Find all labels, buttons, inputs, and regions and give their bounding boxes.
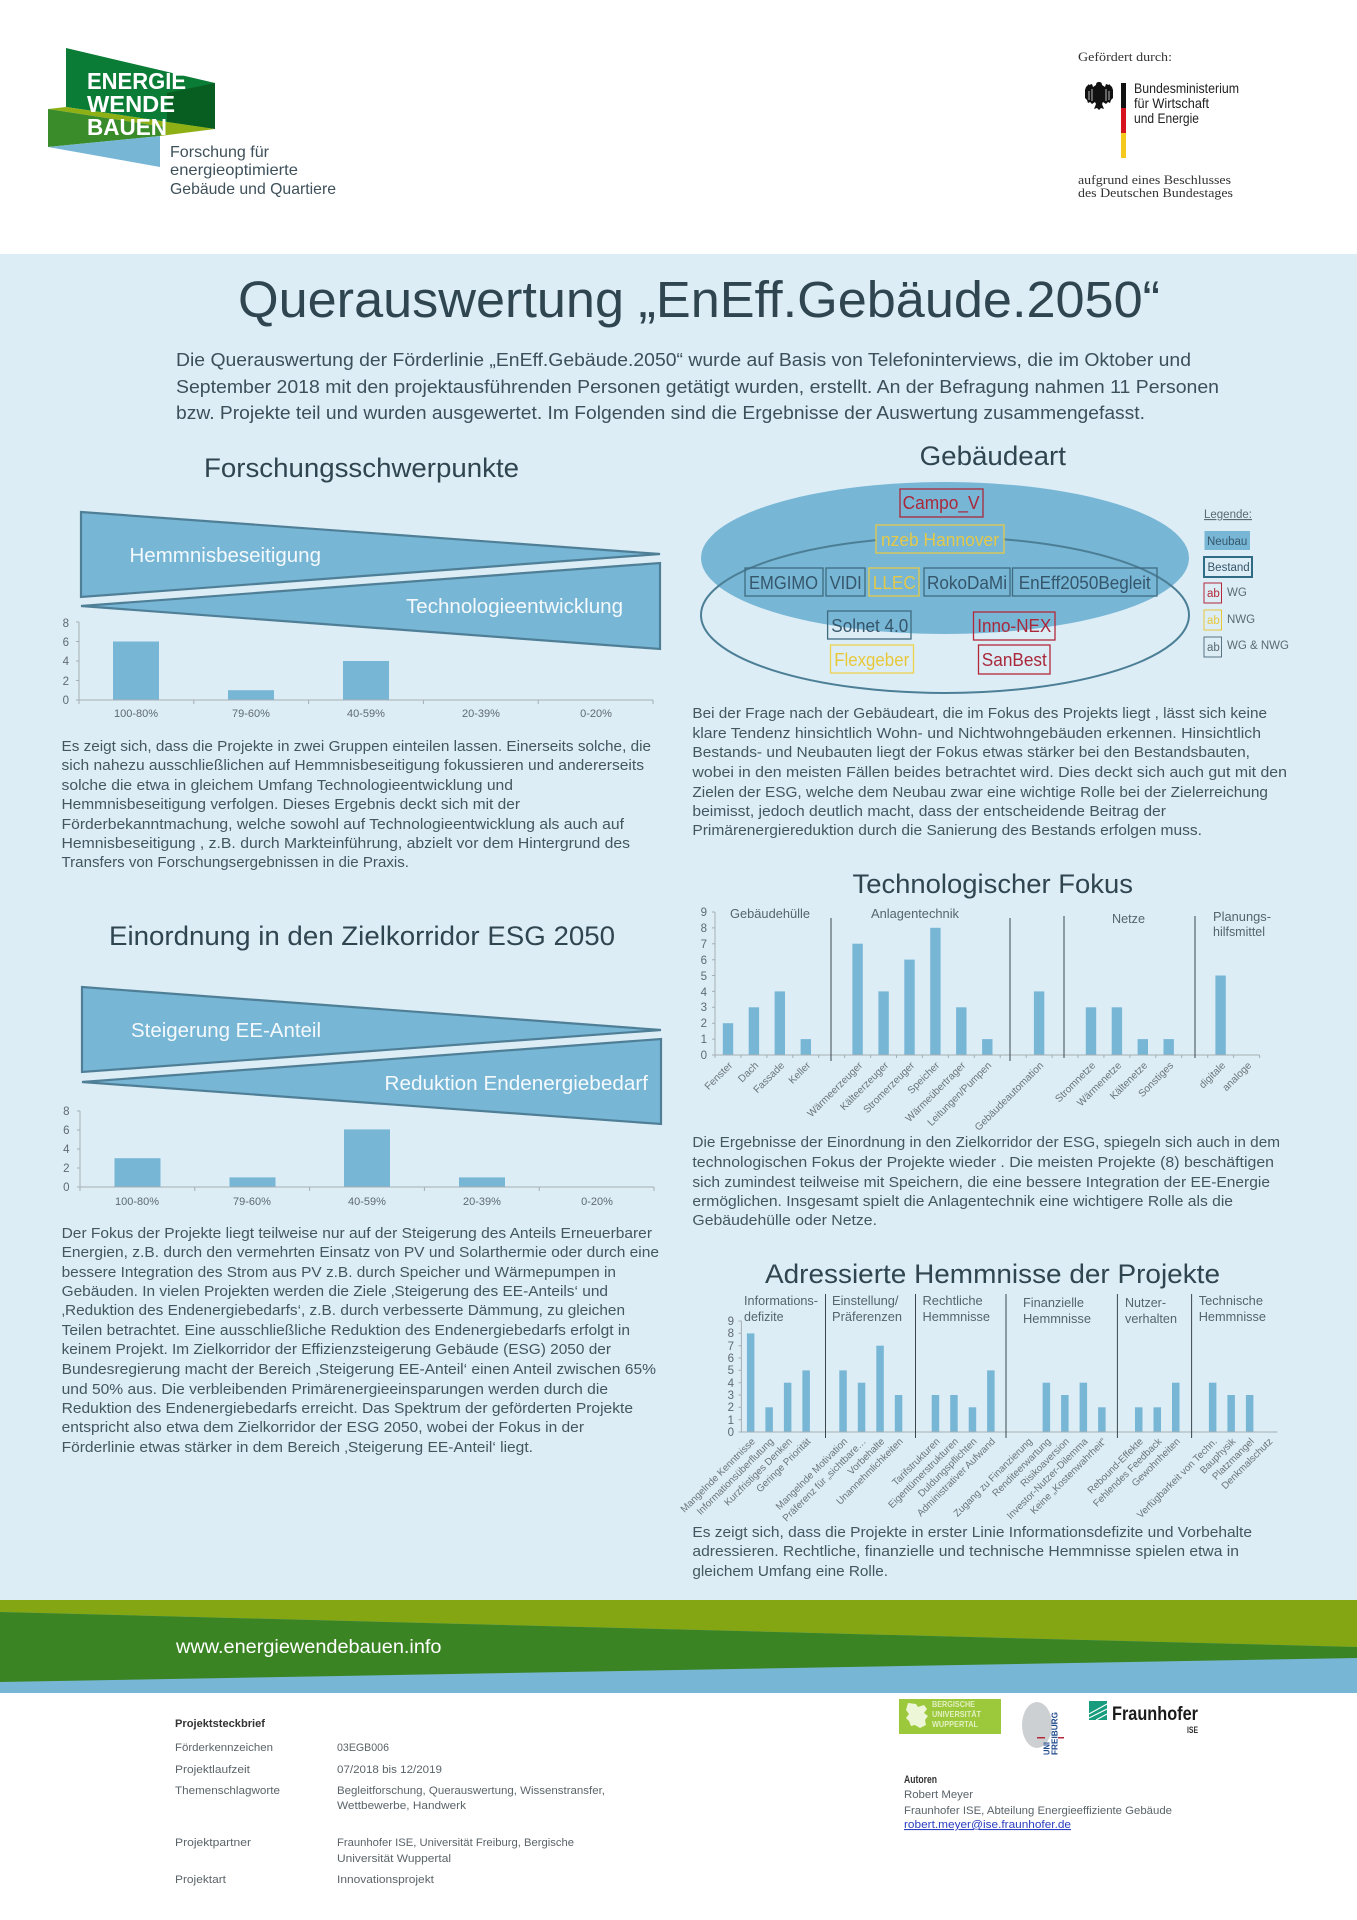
bar chart: Unannehmlichkeiten [835, 1436, 906, 1507]
diagram: wedges [82, 987, 661, 1124]
bar chart: 0-20% [580, 708, 612, 720]
bar chart: 4 [63, 656, 70, 668]
text block [692, 1135, 1280, 1229]
diagram: wedges: Reduktion Endenergiebedarf [384, 1073, 648, 1095]
diagram: wedges: Technologieentwicklung [406, 596, 623, 618]
project profile: Projektlaufzeit [175, 1764, 250, 1776]
bar chart: Fassade [752, 1060, 787, 1096]
logo: Bergische Universität Wuppertal: WUPPERTAL [932, 1719, 978, 1729]
bar chart: Informationsüberflutung [695, 1436, 776, 1517]
venn diagram: Campo_V [903, 492, 980, 514]
bar chart: 40-59% [348, 1196, 386, 1208]
bar chart: Verfügbarkeit von Techn. [1135, 1436, 1220, 1521]
bar chart: Investor-Nutzer-Dilemma [1005, 1436, 1091, 1522]
bar chart: Gebäudeautomation [973, 1060, 1046, 1133]
legend: Legende: [1204, 509, 1252, 521]
bar chart: Gebäudehülle [730, 906, 810, 921]
text block: bessere Integration des Strom aus PV z.B. durch Speicher und Wärmepumpen in [62, 1265, 616, 1281]
text block [62, 739, 651, 871]
bar chart: verhalten [1125, 1311, 1177, 1326]
bar chart: Kurzfristiges Denken [723, 1436, 795, 1509]
project profile: Förderkennzeichen [175, 1742, 273, 1754]
bar chart: Leitungen/Pumpen [926, 1060, 994, 1129]
logo: Energiewendebauen [48, 48, 336, 198]
text block: Primärenergiereduktion durch die Sanierung des Bestands erfolgen muss. [692, 823, 1202, 839]
bar chart: Finanzielle [1023, 1295, 1084, 1310]
bar chart: Kältenetze [1108, 1060, 1150, 1102]
bar chart: Gewohnheiten [1130, 1436, 1183, 1489]
logo: Fraunhofer ISE [1089, 1701, 1199, 1735]
text block: keinem Projekt. Im Zielkorridor der Effizienzsteigerung Gebäude (ESG) 2050 der [62, 1342, 611, 1358]
logo: Bundesministerium für Wirtschaft und Energie: des Deutschen Bundestages [1078, 185, 1233, 200]
project profile: Projektart [175, 1874, 226, 1886]
text block: Energien, z.B. durch den vermehrten Einsatz von PV und Solarthermie oder durch eine [62, 1245, 659, 1261]
text block: klare Tendenz hinsichtlich Wohn- und Nichtwohngebäuden erkennen. Hinsichtlich [692, 726, 1261, 742]
bar chart: 2 [63, 676, 69, 688]
text block: adressieren. Rechtliche, finanzielle und technische Hemmnisse spielen etwa in [692, 1544, 1239, 1560]
bar chart: Zugang zu Finanzierung [952, 1436, 1035, 1519]
intro text: bzw. Projekte teil und wurden ausgewertet. Im Folgenden sind die Ergebnisse der Auswertung zusammengefasst. [176, 402, 1145, 423]
legend: Neubau [1207, 536, 1247, 548]
bar chart: 6 [701, 955, 707, 967]
logo: Energiewendebauen: ENERGIE [87, 68, 186, 94]
panel: Adressierte Hemmnisse [679, 1259, 1277, 1580]
intro text: September 2018 mit den projektausführenden Personen getätigt wurden, erstellt. An der Befragung nahmen 11 Personen [176, 376, 1219, 397]
intro text: Die Querauswertung der Förderlinie „EnEff.Gebäude.2050“ wurde auf Basis von Telefoninterviews, die im Oktober und [176, 349, 1191, 370]
bar chart: Risikoaversion [1019, 1436, 1072, 1490]
bar chart: Bauphysik [1198, 1436, 1238, 1476]
project profile: Universität Wuppertal [337, 1853, 451, 1865]
bar chart: 6 [63, 1125, 70, 1137]
bar chart: Technische [1199, 1293, 1263, 1308]
logo: Uni Freiburg: FREIBURG [1050, 1712, 1060, 1755]
text block: Förderlinie etwas stärker in dem Bereich ‚Steigerung EE-Anteil‘ liegt. [62, 1440, 533, 1456]
bar chart: 1 [728, 1415, 734, 1427]
logo: Uni Freiburg [1022, 1702, 1064, 1755]
text block: Es zeigt sich, dass die Projekte in zwei Gruppen einteilen lassen. Einerseits solche, die [62, 739, 651, 755]
bar chart: Nutzer- [1125, 1295, 1166, 1310]
text block: Bundesregierung macht der Bereich ‚Steigerung EE-Anteil‘ einen Anteil zwischen 65% [62, 1362, 656, 1378]
project profile [175, 1718, 605, 1886]
text block: Transfers von Forschungsergebnissen in die Praxis. [62, 855, 409, 871]
bar chart: 8 [728, 1328, 734, 1340]
bar chart: Wärmeübertrager [904, 1060, 969, 1125]
bar chart: 100-80% [114, 708, 158, 720]
text block: Hemmnisbeseitigung verfolgen. Dieses Ergebnis deckt sich mit der [62, 797, 520, 813]
logo: Bergische Universität Wuppertal: UNIVERSITÄT [932, 1709, 982, 1719]
bar chart: Fehlendes Feedback [1091, 1436, 1164, 1509]
logo: Bundesministerium für Wirtschaft und Energie: für Wirtschaft [1134, 95, 1209, 111]
bar chart: Stromerzeuger [862, 1060, 918, 1116]
bar chart: 79-60% [232, 708, 270, 720]
text block: Teilen betrachtet. Eine ausschließliche Reduktion des Endenergiebedarfs erfolgt in [62, 1323, 630, 1339]
logo: Bundesministerium für Wirtschaft und Energie [1078, 49, 1239, 200]
bar chart: 79-60% [233, 1196, 271, 1208]
text block: solche die etwa in gleichem Umfang Technologieentwicklung und [62, 778, 513, 794]
bar chart: 1 [701, 1034, 707, 1046]
bar chart: analoge [1221, 1060, 1254, 1094]
project profile: 03EGB006 [337, 1742, 389, 1754]
venn diagram: RokoDaMi [927, 572, 1007, 593]
heading: Gebäudeart [920, 441, 1067, 471]
bar chart: 2 [701, 1018, 707, 1030]
bar chart: 9 [728, 1316, 734, 1328]
bar chart: Mangelnde Motivation [774, 1436, 850, 1512]
logo: Energiewendebauen: Gebäude und Quartiere [170, 181, 336, 198]
authors: Robert Meyer [904, 1789, 973, 1801]
bar chart: 40-59% [347, 708, 385, 720]
text block [691, 706, 1287, 839]
project profile: 07/2018 bis 12/2019 [337, 1764, 442, 1776]
title: Querauswertung „EnEff.Gebäude.2050“ [238, 271, 1160, 328]
venn diagram [701, 482, 1189, 693]
text block: Es zeigt sich, dass die Projekte in erster Linie Informationsdefizite und Vorbehalte [692, 1525, 1252, 1541]
bar chart: Mangelnde Kenntnisse [679, 1436, 758, 1515]
bar chart: Anlagentechnik [871, 906, 959, 921]
bar chart: 0-20% [581, 1196, 613, 1208]
text block: Gebäudehülle oder Netze. [692, 1213, 877, 1229]
bar chart: Informations- [744, 1293, 818, 1308]
bar chart: 4 [701, 987, 708, 999]
venn diagram: EnEff2050Begleit [1019, 572, 1151, 593]
text block: ermöglichen. Insgesamt spielt die Anlagentechnik eine wichtigere Rolle als die [692, 1194, 1233, 1210]
bar chart: 8 [63, 618, 69, 630]
text block: Hemnisbeseitigung , z.B. durch Markteinführung, abzielt vor dem Hintergrund des [62, 836, 630, 852]
project profile: Themenschlagworte [175, 1785, 280, 1797]
bar chart: digitale [1198, 1060, 1228, 1091]
bar chart [701, 906, 1271, 1133]
text block: sich zumindest teilweise mit Speichern, die eine bessere Integration der EE-Energie [692, 1175, 1270, 1191]
legend: ab [1207, 642, 1220, 654]
bar chart: Administrativer Aufwand [915, 1436, 998, 1519]
bar chart: Tarifstrukturen [891, 1436, 943, 1488]
footer band [0, 1600, 1357, 1693]
bar chart: Vorbehalte [846, 1436, 887, 1478]
venn diagram: Solnet 4.0 [831, 615, 908, 636]
diagram: wedges: Steigerung EE-Anteil [131, 1020, 321, 1042]
logo: Fraunhofer ISE: ISE [1187, 1725, 1198, 1735]
bar chart: Präferenz für „sichtbare… [781, 1436, 869, 1524]
heading: Adressierte Hemmnisse der Projekte [765, 1259, 1220, 1289]
diagram: wedges [81, 512, 660, 649]
bar chart: 20-39% [463, 1196, 501, 1208]
text block [692, 1525, 1252, 1580]
text block: Gebäuden. In vielen Projekten werden die Ziele ‚Steigerung des EE-Anteils‘ und [62, 1284, 608, 1300]
venn diagram: nzeb Hannover [881, 529, 999, 550]
bar chart: 2 [728, 1402, 734, 1414]
logo: Bundesministerium für Wirtschaft und Energie: Gefördert durch: [1078, 49, 1172, 64]
venn diagram: VIDI [830, 572, 862, 593]
bar chart: Wärmenetze [1076, 1060, 1124, 1109]
heading: Forschungsschwerpunkte [204, 453, 519, 483]
logo: Bergische Universität Wuppertal: BERGISCHE [932, 1699, 975, 1709]
venn diagram: Inno-NEX [977, 615, 1051, 636]
bar chart: Einstellung/ [832, 1293, 899, 1308]
authors: Fraunhofer ISE, Abteilung Energieeffiziente Gebäude [904, 1805, 1172, 1817]
text block: gleichem Umfang eine Rolle. [692, 1564, 888, 1580]
panel: Technologischer Fokus [692, 869, 1280, 1229]
text block [62, 1226, 659, 1456]
bar chart: Präferenzen [832, 1309, 902, 1324]
bar chart [63, 618, 653, 720]
bar chart: hilfsmittel [1213, 924, 1265, 939]
venn diagram: LLEC [873, 572, 916, 593]
text block: Bestands- und Neubauten liegt der Fokus etwas stärker bei den Bestandsbauten, [692, 745, 1250, 761]
heading: Einordnung in den Zielkorridor ESG 2050 [109, 921, 615, 951]
bar chart: Rebound-Effekte [1086, 1436, 1146, 1496]
bar chart: 5 [701, 971, 707, 983]
bar chart [63, 1106, 654, 1208]
panel: Forschungsschwerpunkte [62, 453, 660, 871]
bar chart: 7 [701, 939, 707, 951]
authors: Autoren [904, 1774, 937, 1786]
bar chart: 6 [728, 1353, 734, 1365]
project profile: Fraunhofer ISE, Universität Freiburg, Bergische [337, 1837, 574, 1849]
bar chart: 0 [63, 695, 69, 707]
bar chart: Wärmeerzeuger [806, 1060, 866, 1120]
bar chart: Dach [737, 1060, 761, 1085]
website link: www.energiewendebauen.info [175, 1637, 442, 1658]
bar chart: 4 [728, 1378, 735, 1390]
bar chart: Duldungspflichten [916, 1436, 980, 1500]
text block: Die Ergebnisse der Einordnung in den Zielkorridor der ESG, spiegeln sich auch in dem [692, 1135, 1280, 1151]
legend: NWG [1227, 614, 1255, 626]
bar chart: 6 [63, 637, 69, 649]
text block: ‚Reduktion des Endenergiebedarfs‘, z.B. durch verbesserte Dämmung, zu gleichen [62, 1303, 625, 1319]
heading: Technologischer Fokus [852, 869, 1133, 899]
bar chart: 100-80% [115, 1196, 159, 1208]
text block: und 50% aus. Die verbleibenden Primärenergieeinsparungen werden durch die [62, 1382, 608, 1398]
intro text [176, 349, 1219, 423]
text block: wobei in den meisten Fällen beides betrachtet wird. Dies deckt sich auch gut mit den [691, 765, 1287, 781]
venn diagram: Flexgeber [834, 649, 909, 670]
diagram: wedges: Hemmnisbeseitigung [130, 545, 321, 567]
text block: Bei der Frage nach der Gebäudeart, die im Fokus des Projekts liegt , lässt sich keine [692, 706, 1267, 722]
bar chart: Sonstiges [1137, 1060, 1176, 1100]
project profile: Begleitforschung, Querauswertung, Wissenstransfer, [337, 1785, 605, 1797]
bar chart: Renditeerwartung [991, 1436, 1053, 1499]
bar chart: 0 [728, 1427, 734, 1439]
project profile: Projektpartner [175, 1837, 251, 1849]
logo: Bundesministerium für Wirtschaft und Energie: und Energie [1134, 110, 1199, 126]
text block: Zielen der ESG, welche dem Neubau zwar eine wichtige Rolle bei der Zielerreichung [692, 785, 1268, 801]
bar chart: Keine „Kostenwahrheit“ [1029, 1436, 1109, 1517]
logo: Fraunhofer ISE: Fraunhofer [1112, 1704, 1199, 1725]
text block: entspricht also etwa dem Zielkorridor der ESG 2050, wobei der Fokus in der [62, 1420, 584, 1436]
text block: beimisst, jedoch deutlich macht, dass der entscheidende Beitrag der [692, 804, 1166, 820]
bar chart: 4 [63, 1144, 70, 1156]
legend: WG [1227, 587, 1247, 599]
logo: Energiewendebauen: BAUEN [87, 114, 167, 140]
legend: ab [1207, 588, 1220, 600]
bar chart: Netze [1112, 911, 1145, 926]
logo: Energiewendebauen: energieoptimierte [170, 162, 298, 179]
bar chart: Denkmalschutz [1220, 1436, 1275, 1492]
legend: Bestand [1208, 562, 1250, 574]
legend [1204, 509, 1289, 657]
bar chart: 2 [63, 1163, 70, 1175]
venn diagram: SanBest [982, 649, 1047, 670]
bar chart: Hemmnisse [1199, 1309, 1266, 1324]
bar chart: 20-39% [462, 708, 500, 720]
bar chart: Rechtliche [922, 1293, 983, 1308]
bar chart: Hemmnisse [1023, 1311, 1091, 1326]
bar chart: 8 [63, 1106, 70, 1118]
bar chart: 3 [701, 1002, 707, 1014]
bar chart: Hemmnisse [922, 1309, 990, 1324]
project profile: Wettbewerbe, Handwerk [337, 1800, 467, 1812]
bar chart: 5 [728, 1365, 734, 1377]
bar chart: Planungs- [1213, 909, 1271, 924]
venn diagram: EMGIMO [749, 572, 818, 593]
bar chart: 9 [701, 907, 707, 919]
panel: Gebäudeart [691, 441, 1289, 839]
logo: Energiewendebauen: WENDE [87, 91, 175, 117]
logo: Uni Freiburg: UNI [1042, 1742, 1052, 1755]
text block: Der Fokus der Projekte liegt teilweise nur auf der Steigerung des Anteils Erneuerbarer [62, 1226, 652, 1242]
authors: robert.meyer@ise.fraunhofer.de [904, 1819, 1071, 1831]
bar chart: 3 [728, 1390, 734, 1402]
text block: Reduktion des Endenergiebedarfs erreicht. Das Spektrum der geförderten Projekte [62, 1401, 633, 1417]
logo: Bergische Universität Wuppertal [899, 1699, 1001, 1734]
authors [904, 1774, 1172, 1831]
project profile: Innovationsprojekt [337, 1874, 434, 1886]
bar chart: Eigentümerstrukturen [886, 1436, 961, 1511]
bar chart: defizite [744, 1309, 784, 1324]
bar chart: Speicher [906, 1060, 943, 1097]
bar chart: 8 [701, 923, 707, 935]
text block: sich nahezu ausschließlichen auf Hemmnisbeseitigung fokussieren und andererseits [62, 758, 644, 774]
bar chart [679, 1293, 1277, 1524]
legend: WG & NWG [1227, 640, 1289, 652]
bar chart: Geringe Priorität [755, 1436, 813, 1495]
logo: Energiewendebauen: Forschung für [170, 144, 270, 161]
panel: Einordnung in den Zielkorridor [62, 921, 661, 1456]
bar chart: 0 [701, 1050, 707, 1062]
project profile: Projektsteckbrief [175, 1718, 265, 1730]
logo: Bundesministerium für Wirtschaft und Energie: aufgrund eines Beschlusses [1078, 172, 1231, 187]
bar chart: 0 [63, 1182, 70, 1194]
bar chart: Platzmangel [1211, 1436, 1257, 1483]
bar chart: 7 [728, 1341, 734, 1353]
text block: technologischen Fokus der Projekte wieder . Die meisten Projekte (8) beschäftigen [692, 1155, 1274, 1171]
bar chart: Kälteerzeuger [838, 1060, 892, 1113]
bar chart: Fenster [703, 1060, 736, 1093]
legend: ab [1207, 615, 1220, 627]
bar chart: Keller [787, 1060, 814, 1087]
bar chart: Stromnetze [1054, 1060, 1098, 1105]
text block: Förderbekanntmachung, welche sowohl auf Technologieentwicklung als auch auf [62, 817, 625, 833]
logo: Bundesministerium für Wirtschaft und Energie: Bundesministerium [1134, 80, 1239, 96]
